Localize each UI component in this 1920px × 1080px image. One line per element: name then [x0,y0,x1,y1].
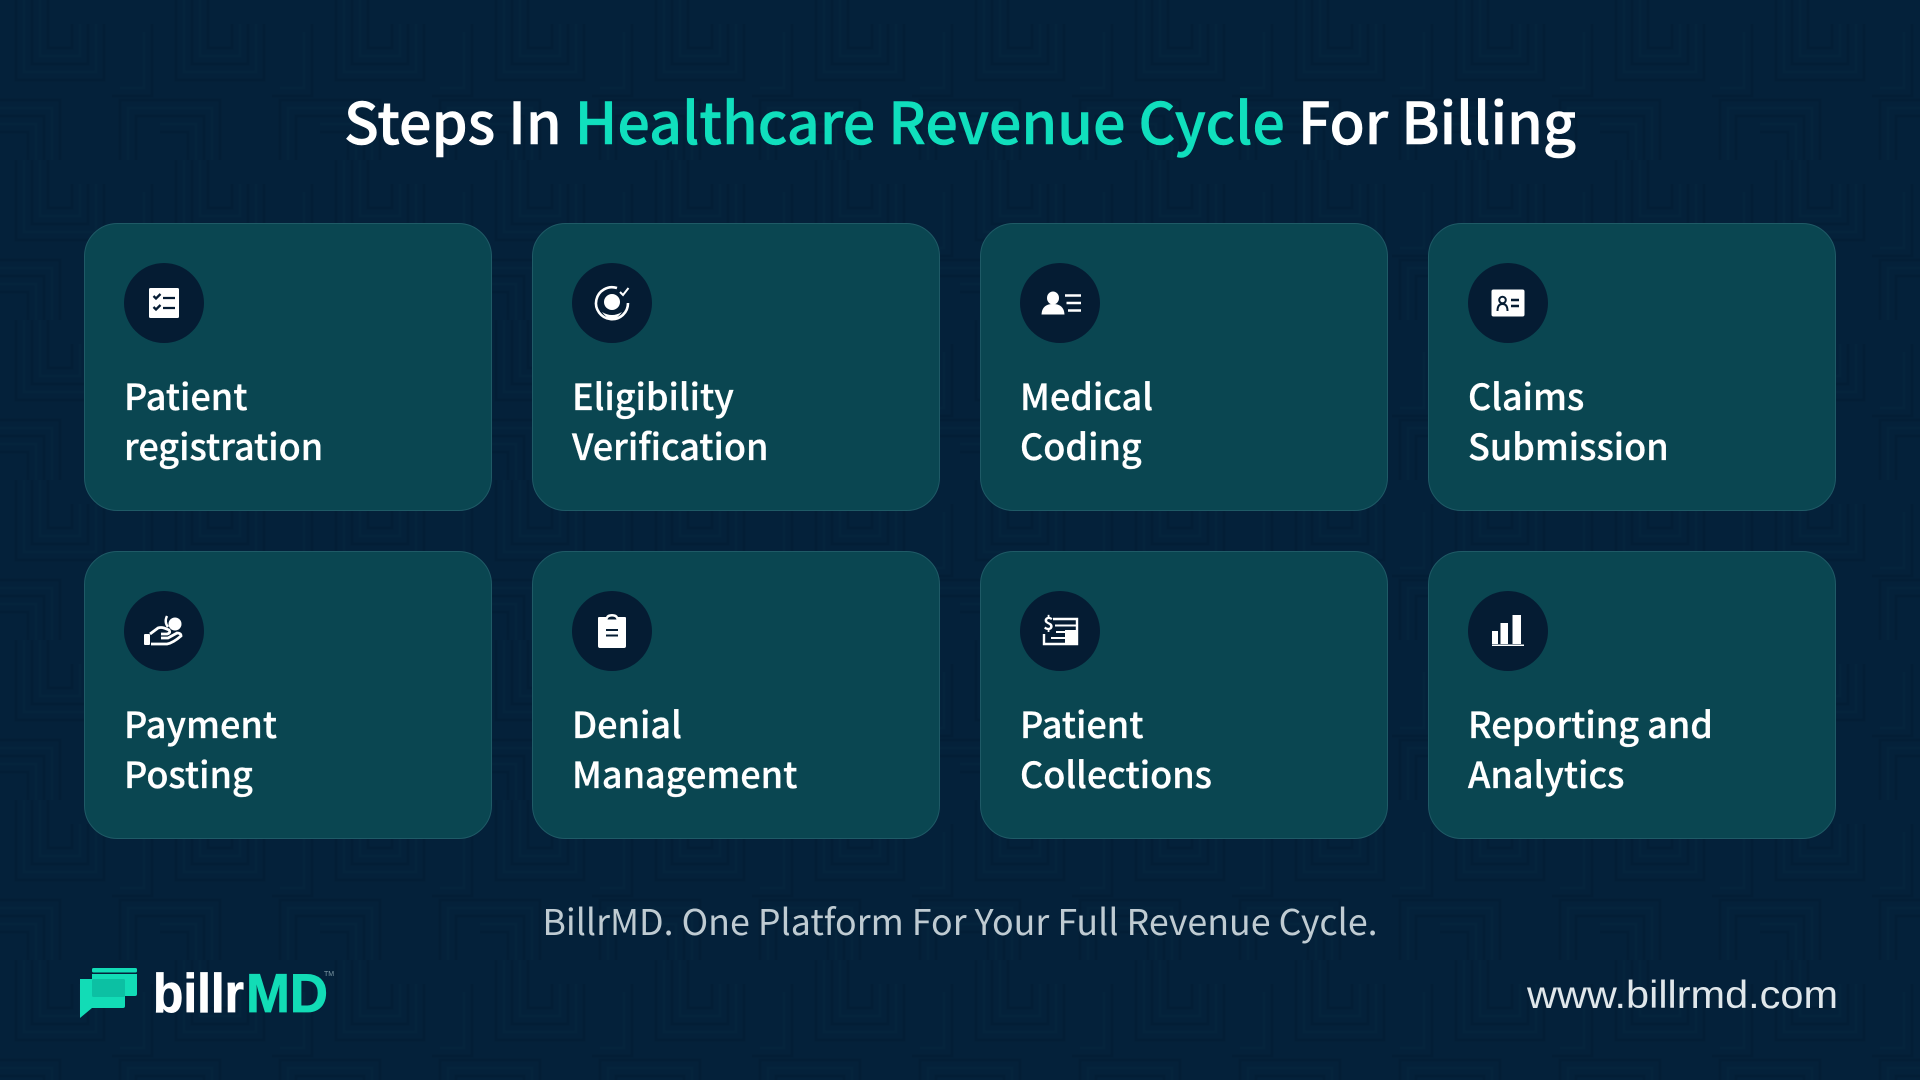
panel: Payment Posting [84,552,492,838]
panel: Reporting and Analytics [1428,552,1836,838]
trademark: TM [324,971,334,978]
label: Payment [124,697,277,749]
title: Steps In Healthcare Revenue Cycle For Billing [344,77,1576,161]
tagline: BillrMD. One Platform For Your Full Revenue Cycle. [542,894,1378,946]
logo: billrMD [80,962,334,1024]
logo wordmark: MD: MD [246,962,328,1024]
panel: Claims Submission [1428,224,1836,510]
icon: checklist [124,263,204,343]
panel: Patient registration [84,224,492,510]
icon: dollar statement [1020,591,1100,671]
icon: hand with coin [124,591,204,671]
label: Denial [572,697,682,749]
icon: clipboard [572,591,652,671]
label: Submission [1468,419,1669,471]
panel: Denial Management [532,552,940,838]
label: Collections [1020,747,1212,799]
label: Analytics [1468,747,1624,799]
label: Reporting and [1468,697,1713,749]
label: Claims [1468,369,1584,421]
panel: Patient Collections [980,552,1388,838]
logo icon: chat bubbles [80,968,137,1018]
label: Posting [124,747,253,799]
label: Coding [1020,419,1142,471]
logo wordmark: billr: billr [153,962,244,1024]
icon: dollar statement: $ [1043,610,1054,636]
label: Patient [1020,697,1144,749]
icon: ID card [1468,263,1548,343]
label: Verification [571,419,769,471]
label: Medical [1020,369,1153,421]
label: registration [124,419,323,471]
icon: target check [572,263,652,343]
label: Eligibility [572,369,734,421]
website url: www.billrmd.com [1526,974,1838,1017]
icon: bar chart [1468,591,1548,671]
label: Patient [124,369,248,421]
panel: Medical Coding [980,224,1388,510]
label: Management [572,747,797,799]
icon: person with list [1020,263,1100,343]
panel: Eligibility Verification [532,224,940,510]
